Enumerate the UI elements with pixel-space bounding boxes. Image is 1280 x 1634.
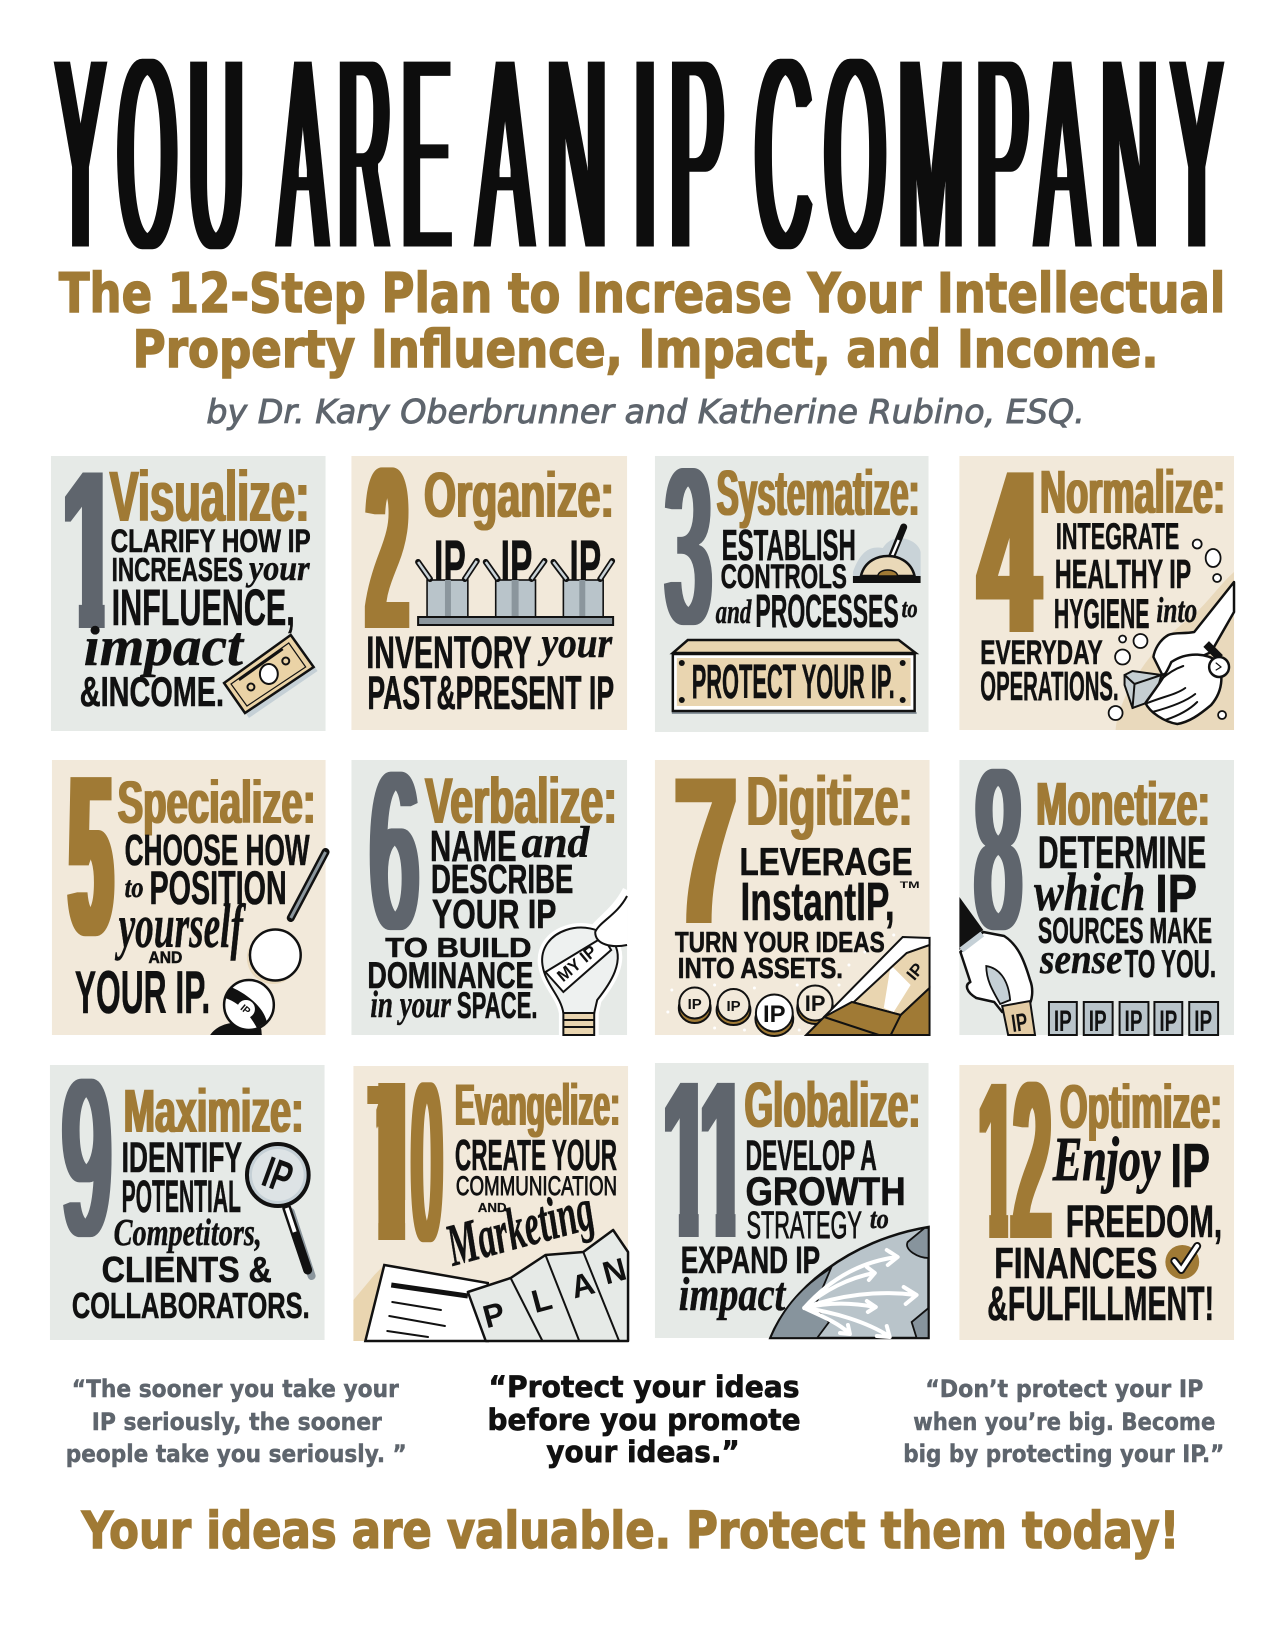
icon: open IP box: IP <box>903 959 928 984</box>
panel: 4 Normalize <box>959 423 1234 730</box>
illustration: folded plan: N <box>599 1251 630 1291</box>
panel: 5 Specialize <box>52 728 326 1035</box>
sign: protect your IP: PROTECT YOUR IP. <box>692 656 895 709</box>
icon: IP coins: IP <box>688 996 702 1013</box>
panel: 2 Organize: 2 <box>367 419 407 677</box>
illustration: folded plan: P <box>479 1295 509 1335</box>
title: IP <box>634 0 738 310</box>
body text: which <box>1034 862 1145 922</box>
body text: ESTABLISH <box>722 521 856 570</box>
panel: 10 Evangelize <box>353 1036 630 1341</box>
title <box>56 0 1236 310</box>
icon: IP boxes on shelf: IP <box>501 526 533 600</box>
panel: 6 Verbalize <box>351 726 627 1035</box>
icon: light bulb with MY IP band <box>542 890 627 1035</box>
title: AN <box>478 0 621 310</box>
body text: INCREASES <box>112 551 243 588</box>
body text <box>679 1132 906 1321</box>
illustration: hand picking IP tile: IP <box>1010 1008 1029 1038</box>
quote: center: your ideas.” <box>546 1435 740 1469</box>
body text: impact <box>679 1268 787 1321</box>
subtitle <box>59 262 1225 380</box>
panel: 3 Systematize: 3 <box>666 422 711 670</box>
panel: 8 Monetize: 8 <box>975 722 1021 977</box>
icon: IP eight ball <box>210 980 274 1035</box>
panel: 9 Maximize <box>50 1033 325 1340</box>
step number 10: 10 <box>375 1036 441 1288</box>
body text: PROCESSES <box>755 585 899 637</box>
body text: CLIENTS & <box>102 1249 272 1290</box>
body text: TURN YOUR IDEAS <box>675 927 885 959</box>
panel: 5 Specialize: 5 <box>70 728 112 983</box>
panel: 7 Digitize <box>655 734 930 1036</box>
body text: GROWTH <box>745 1170 906 1214</box>
body text: sense <box>1039 937 1123 983</box>
icon: magnifying glass <box>247 1144 312 1276</box>
body text: COLLABORATORS. <box>72 1285 310 1326</box>
body text: INTEGRATE <box>1056 516 1179 557</box>
sparkles <box>666 934 895 1032</box>
panel: 4 Normalize: 4 <box>979 423 1039 682</box>
panel: 11 Globalize <box>655 1036 929 1338</box>
body text: AND <box>478 1200 507 1215</box>
byline: by Dr. Kary Oberbrunner and Katherine Rubino, ESQ. <box>206 392 1085 431</box>
body text <box>366 621 614 719</box>
quote: center: before you promote <box>488 1403 801 1437</box>
body text <box>439 1131 617 1279</box>
heading: Digitize: Digitize: <box>746 762 913 840</box>
icon: row of IP tiles: IP <box>1159 1005 1177 1038</box>
body text: IDENTIFY <box>122 1134 242 1182</box>
body text: Marketing <box>439 1176 600 1279</box>
panel: 8 Monetize <box>959 722 1234 1038</box>
body text: AND <box>148 948 182 967</box>
body text: to <box>902 594 918 623</box>
heading: Maximize: Maximize: <box>124 1077 304 1145</box>
step number 7: 7 <box>676 734 736 968</box>
heading: Globalize: Globalize: <box>744 1069 921 1141</box>
quote: right: “Don’t protect your IP <box>925 1375 1203 1403</box>
sign: protect your IP <box>672 640 917 714</box>
body text: to <box>125 871 143 904</box>
icon: dollar bill <box>224 635 318 718</box>
illustration: washing hands with soap <box>1116 572 1234 730</box>
illustration: folded plan: L <box>528 1280 556 1320</box>
body text: FINANCES <box>994 1239 1157 1288</box>
body text: COMMUNICATION <box>456 1171 617 1201</box>
quote: left <box>66 1375 407 1468</box>
icon: soap bubbles <box>1109 540 1226 720</box>
body text: TO BUILD <box>385 932 532 963</box>
body text <box>980 516 1197 709</box>
body text: HYGIENE <box>1054 590 1149 637</box>
icon: open IP box <box>806 937 930 1035</box>
icon: IP coins: IP <box>726 998 741 1015</box>
body text: InstantIP, <box>740 872 895 932</box>
heading: Evangelize: Evangelize: <box>455 1074 620 1138</box>
body text: Competitors, <box>114 1212 262 1254</box>
illustration: globe with arrows <box>770 1227 929 1338</box>
quote: right: when you’re big. Become <box>913 1408 1215 1436</box>
body text: INVENTORY <box>366 627 532 678</box>
body text: and <box>716 594 752 631</box>
icon: row of IP tiles: IP <box>1089 1005 1107 1038</box>
panel: 2 Organize <box>351 419 627 730</box>
step number 10 <box>367 1082 444 1242</box>
panel: 9 Maximize: 9 <box>63 1033 111 1283</box>
icon: magnifying glass: IP <box>256 1148 299 1203</box>
icon: row of IP tiles <box>1049 1002 1218 1038</box>
body text: PAST&PRESENT IP <box>367 667 614 719</box>
title: YOU <box>56 0 256 310</box>
body text <box>716 521 918 637</box>
body text: in your <box>370 984 452 1026</box>
body text: to <box>870 1204 889 1235</box>
quote: right <box>903 1375 1224 1468</box>
icon: check mark badge <box>1165 1245 1199 1279</box>
body text: EVERYDAY <box>980 634 1103 672</box>
illustration: document <box>353 1265 488 1341</box>
body text <box>80 523 311 715</box>
body text: impact <box>84 616 244 678</box>
subtitle: Property Influence, Impact, and Income. <box>133 320 1159 380</box>
quote: right: big by protecting your IP.” <box>903 1440 1224 1468</box>
body text: DEVELOP A <box>745 1132 877 1180</box>
body text: CREATE YOUR <box>455 1131 617 1180</box>
body text: YOUR IP <box>432 891 556 937</box>
body text: DESCRIBE <box>431 856 573 902</box>
body text <box>675 841 920 985</box>
icon: IP boxes on shelf: IP <box>434 526 466 600</box>
panel: 1 Visualize <box>51 456 326 731</box>
body text: IP <box>1155 864 1197 924</box>
body text: your <box>245 548 311 588</box>
body text: LEVERAGE <box>739 841 913 884</box>
icon: IP coins: IP <box>805 991 825 1016</box>
step number 12: 12 <box>978 1037 1052 1287</box>
icon: IP eight ball: IP <box>238 1003 252 1018</box>
body text: SPACE. <box>457 985 537 1026</box>
icon: light bulb with MY IP band: MY IP <box>553 942 601 986</box>
body text: into <box>1156 590 1197 630</box>
body text: CLARIFY HOW IP <box>111 523 311 559</box>
illustration: hand picking IP tile <box>959 897 1035 1038</box>
body text: your <box>537 621 613 667</box>
body text: OPERATIONS. <box>980 663 1119 709</box>
body text: POTENTIAL <box>122 1171 241 1222</box>
body text: TO YOU. <box>1125 943 1216 986</box>
body text: TM <box>900 880 920 890</box>
panel: 6 Verbalize: 6 <box>370 726 418 976</box>
icon: IP coins: IP <box>763 1001 786 1028</box>
icon: IP boxes on shelf <box>418 526 613 625</box>
title: ARE <box>279 0 463 310</box>
heading: Systematize: Systematize: <box>717 457 920 529</box>
body text: NAME <box>430 822 517 871</box>
body text: CHOOSE HOW <box>125 826 310 875</box>
body text: STRATEGY <box>746 1205 862 1247</box>
body text <box>987 1126 1222 1331</box>
body text: IP <box>1170 1132 1210 1201</box>
body text: CONTROLS <box>721 558 847 596</box>
heading: Verbalize: Verbalize: <box>425 764 617 837</box>
illustration: folded plan <box>468 1230 630 1341</box>
body text: INTO ASSETS. <box>678 953 843 985</box>
body text: POSITION <box>149 862 287 914</box>
panel: 1 Visualize: 1 <box>60 423 120 676</box>
illustration: folded plan: A <box>567 1265 598 1305</box>
panel: 12 Optimize <box>959 1037 1234 1340</box>
panel: 3 Systematize <box>655 422 929 732</box>
body text <box>72 1134 310 1326</box>
body text: EXPAND IP <box>681 1240 820 1282</box>
quote: left: people take you seriously. ” <box>66 1440 407 1468</box>
body text: &INCOME. <box>80 668 224 715</box>
icon: row of IP tiles: IP <box>1194 1005 1212 1038</box>
icon: row of IP tiles: IP <box>1125 1005 1142 1038</box>
body text: DOMINANCE <box>367 955 534 996</box>
quote: center: “Protect your ideas <box>489 1370 800 1404</box>
icon: IP boxes on shelf: IP <box>569 526 601 600</box>
icon: IP coins <box>679 986 833 1036</box>
icon: pool cue <box>291 852 326 918</box>
quote: center <box>488 1370 801 1469</box>
heading: Visualize: Visualize: <box>110 458 310 537</box>
body text: YOUR IP. <box>75 959 210 1026</box>
quote: left: “The sooner you take your <box>72 1375 399 1403</box>
icon: lever switch <box>853 527 921 583</box>
icon: row of IP tiles: IP <box>1054 1005 1072 1038</box>
heading: Specialize: Specialize: <box>118 769 316 836</box>
body text <box>367 819 590 1026</box>
body text: Enjoy <box>1052 1126 1161 1194</box>
body text: INFLUENCE, <box>112 579 295 636</box>
body text <box>75 826 310 1026</box>
body text: and <box>522 819 590 867</box>
quote: left: IP seriously, the sooner <box>92 1408 382 1436</box>
heading: Organize: Organize: <box>424 459 614 531</box>
body text: yourself <box>114 893 246 961</box>
icon: cue ball <box>247 930 301 984</box>
body text <box>1034 827 1216 986</box>
step number 11: 11 <box>662 1036 748 1286</box>
